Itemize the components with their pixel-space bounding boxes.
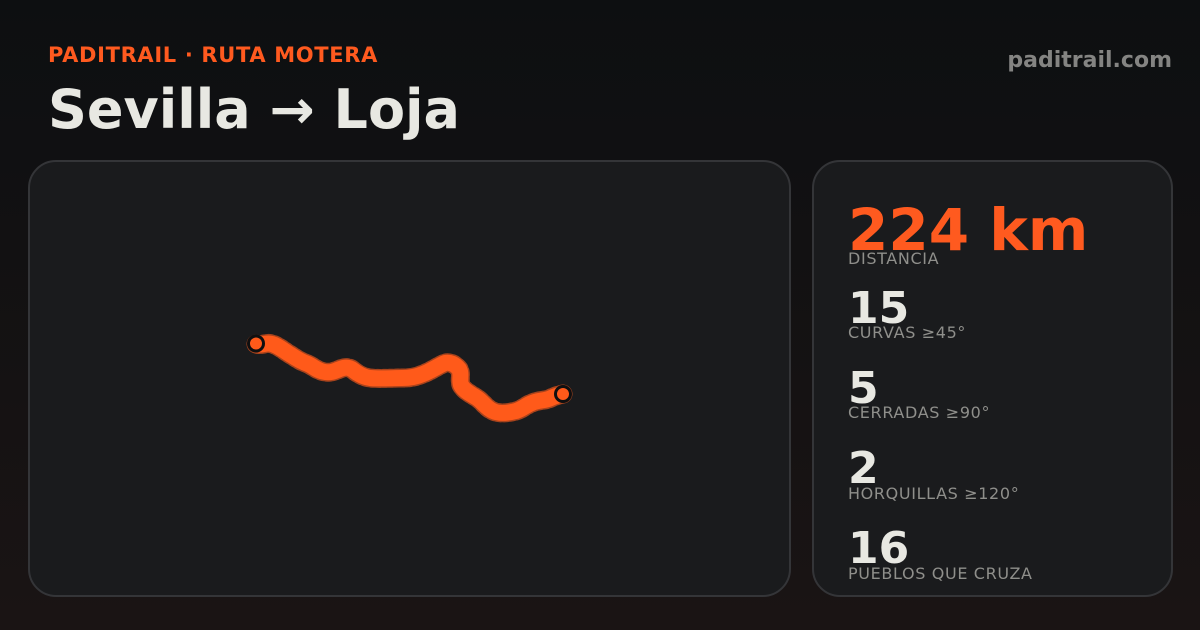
panel: stats [812, 160, 1173, 597]
brand url: paditrail.com [1007, 48, 1172, 73]
stat: towns value: 16 [848, 523, 909, 574]
stat: sharp value: 5 [848, 363, 879, 414]
stat: curves value: 15 [848, 283, 909, 334]
stat: hairpins value: 2 [848, 443, 879, 494]
end marker [556, 386, 570, 402]
start marker [248, 336, 264, 351]
stat: distance label: DISTANCIA [848, 249, 939, 268]
stat: sharp label: CERRADAS ≥90° [848, 403, 990, 422]
route line [256, 343, 563, 413]
stat: curves label: CURVAS ≥45° [848, 323, 966, 342]
stat: distance value: 224 km [848, 196, 1088, 264]
stat: hairpins label: HORQUILLAS ≥120° [848, 484, 1019, 503]
eyebrow heading: PADITRAIL · RUTA MOTERA [48, 43, 378, 67]
title: Sevilla → Loja [48, 78, 460, 141]
panel: map [28, 160, 791, 597]
stat: towns label: PUEBLOS QUE CRUZA [848, 564, 1033, 583]
